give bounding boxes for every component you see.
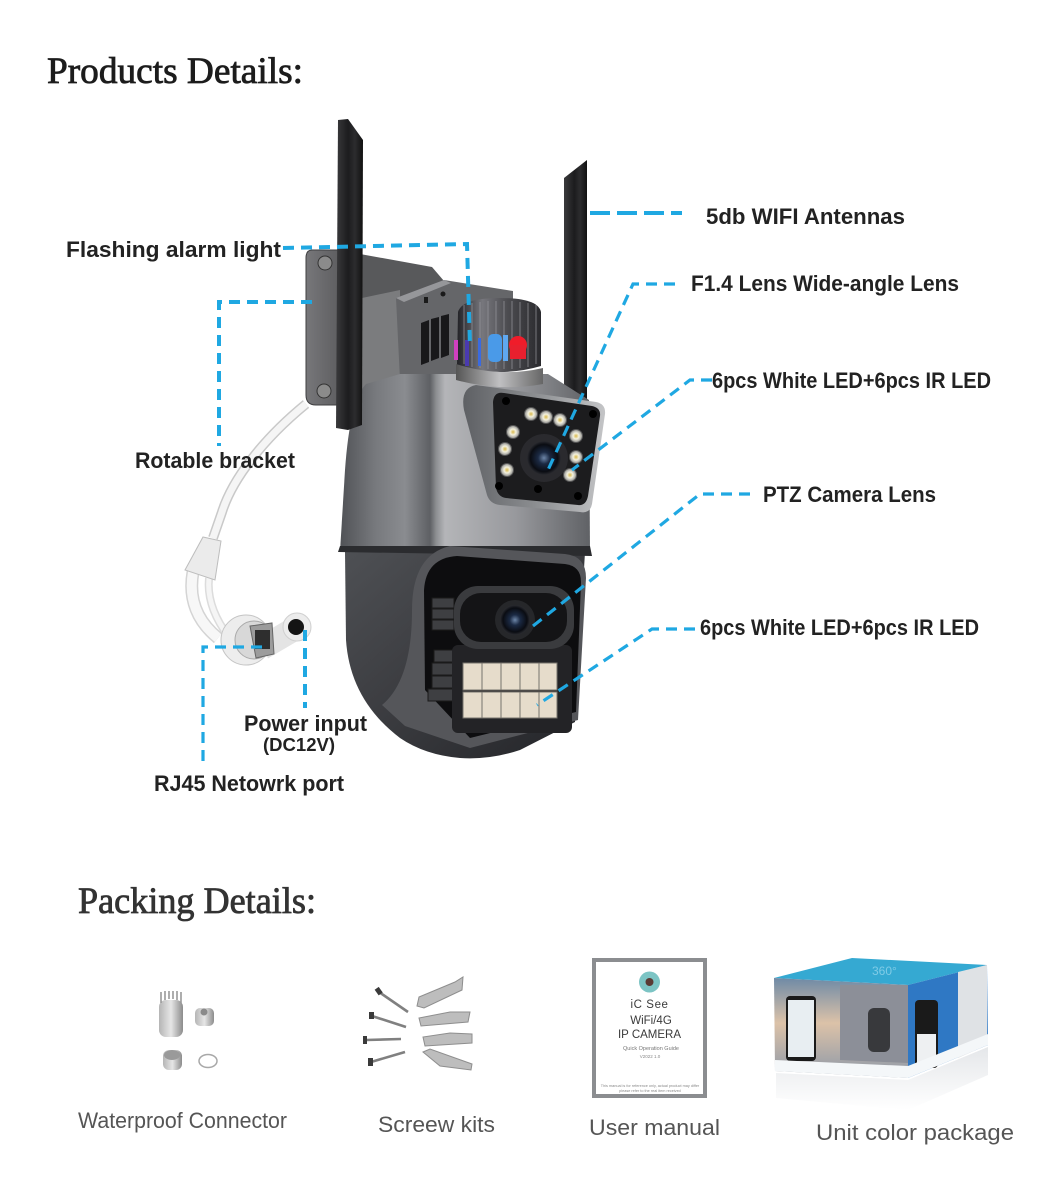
callout lines [203,213,750,766]
label: Flashing alarm light: Flashing alarm light [66,237,282,262]
label: White LED and IR LED, PTZ camera: 6pcs White LED+6pcs IR LED [700,615,979,640]
item: unit color package: 360° [872,964,897,978]
label: F1.4 Lens Wide-angle Lens: F1.4 Lens Wide-angle Lens [691,271,959,296]
icon: PTZ recess [382,546,586,748]
item: user manual: iC See [630,999,669,1011]
label: RJ45 network port: RJ45 Netowrk port [154,771,345,796]
icon: PTZ lens module [428,586,574,733]
heading: Products Details: Products Details: [47,51,303,92]
label: White LED and IR LED, fixed camera: 6pcs White LED+6pcs IR LED [712,368,991,393]
item: screw kits [363,977,472,1070]
icon: PTZ LED panel [463,663,557,718]
item: user manual: This manual is for reference only, actual product may differ [601,1084,700,1088]
icon: manual logo [639,972,660,992]
item: unit color package [774,958,988,1110]
caption: Unit color package: Unit color package [816,1120,1014,1145]
icon: upper camera housing [340,374,590,552]
caption: User manual: User manual [589,1115,720,1140]
caption: Waterproof Connector: Waterproof Connector [78,1108,287,1133]
item: user manual [592,958,707,1098]
icon: lower dome housing [345,552,585,758]
icon: camera LED ring [498,408,582,482]
icon: fixed wide-angle camera [463,385,605,512]
icon: flashing alarm siren [454,298,543,387]
label: Power input: Power input [244,711,368,736]
label: Rotable bracket: Rotable bracket [135,448,296,473]
item: user manual: please refer to the real item received [619,1089,681,1093]
item: user manual: Quick Operation Guide [623,1046,679,1052]
item: user manual: IP CAMERA [618,1029,681,1041]
icon: rear antenna [564,160,587,410]
caption: Screew kits: Screew kits [378,1112,495,1137]
icon: wall bracket [306,250,513,420]
item: user manual: V2022 1.0 [640,1054,661,1059]
icon: housing rim [338,546,592,556]
heading: Packing Details: Packing Details: [78,881,316,922]
label: 5db WIFI Antennas: 5db WIFI Antennas [706,204,905,229]
label: DC12V: (DC12V) [263,735,335,755]
icon: cable splitter [185,537,221,580]
item: waterproof connector [159,991,217,1070]
label: PTZ Camera Lens: PTZ Camera Lens [763,482,936,507]
icon: power and network cable [185,404,311,665]
item: user manual: WiFi/4G [630,1015,672,1027]
illustration: dual-lens PTZ camera [185,119,605,758]
icon: front antenna [336,119,363,430]
